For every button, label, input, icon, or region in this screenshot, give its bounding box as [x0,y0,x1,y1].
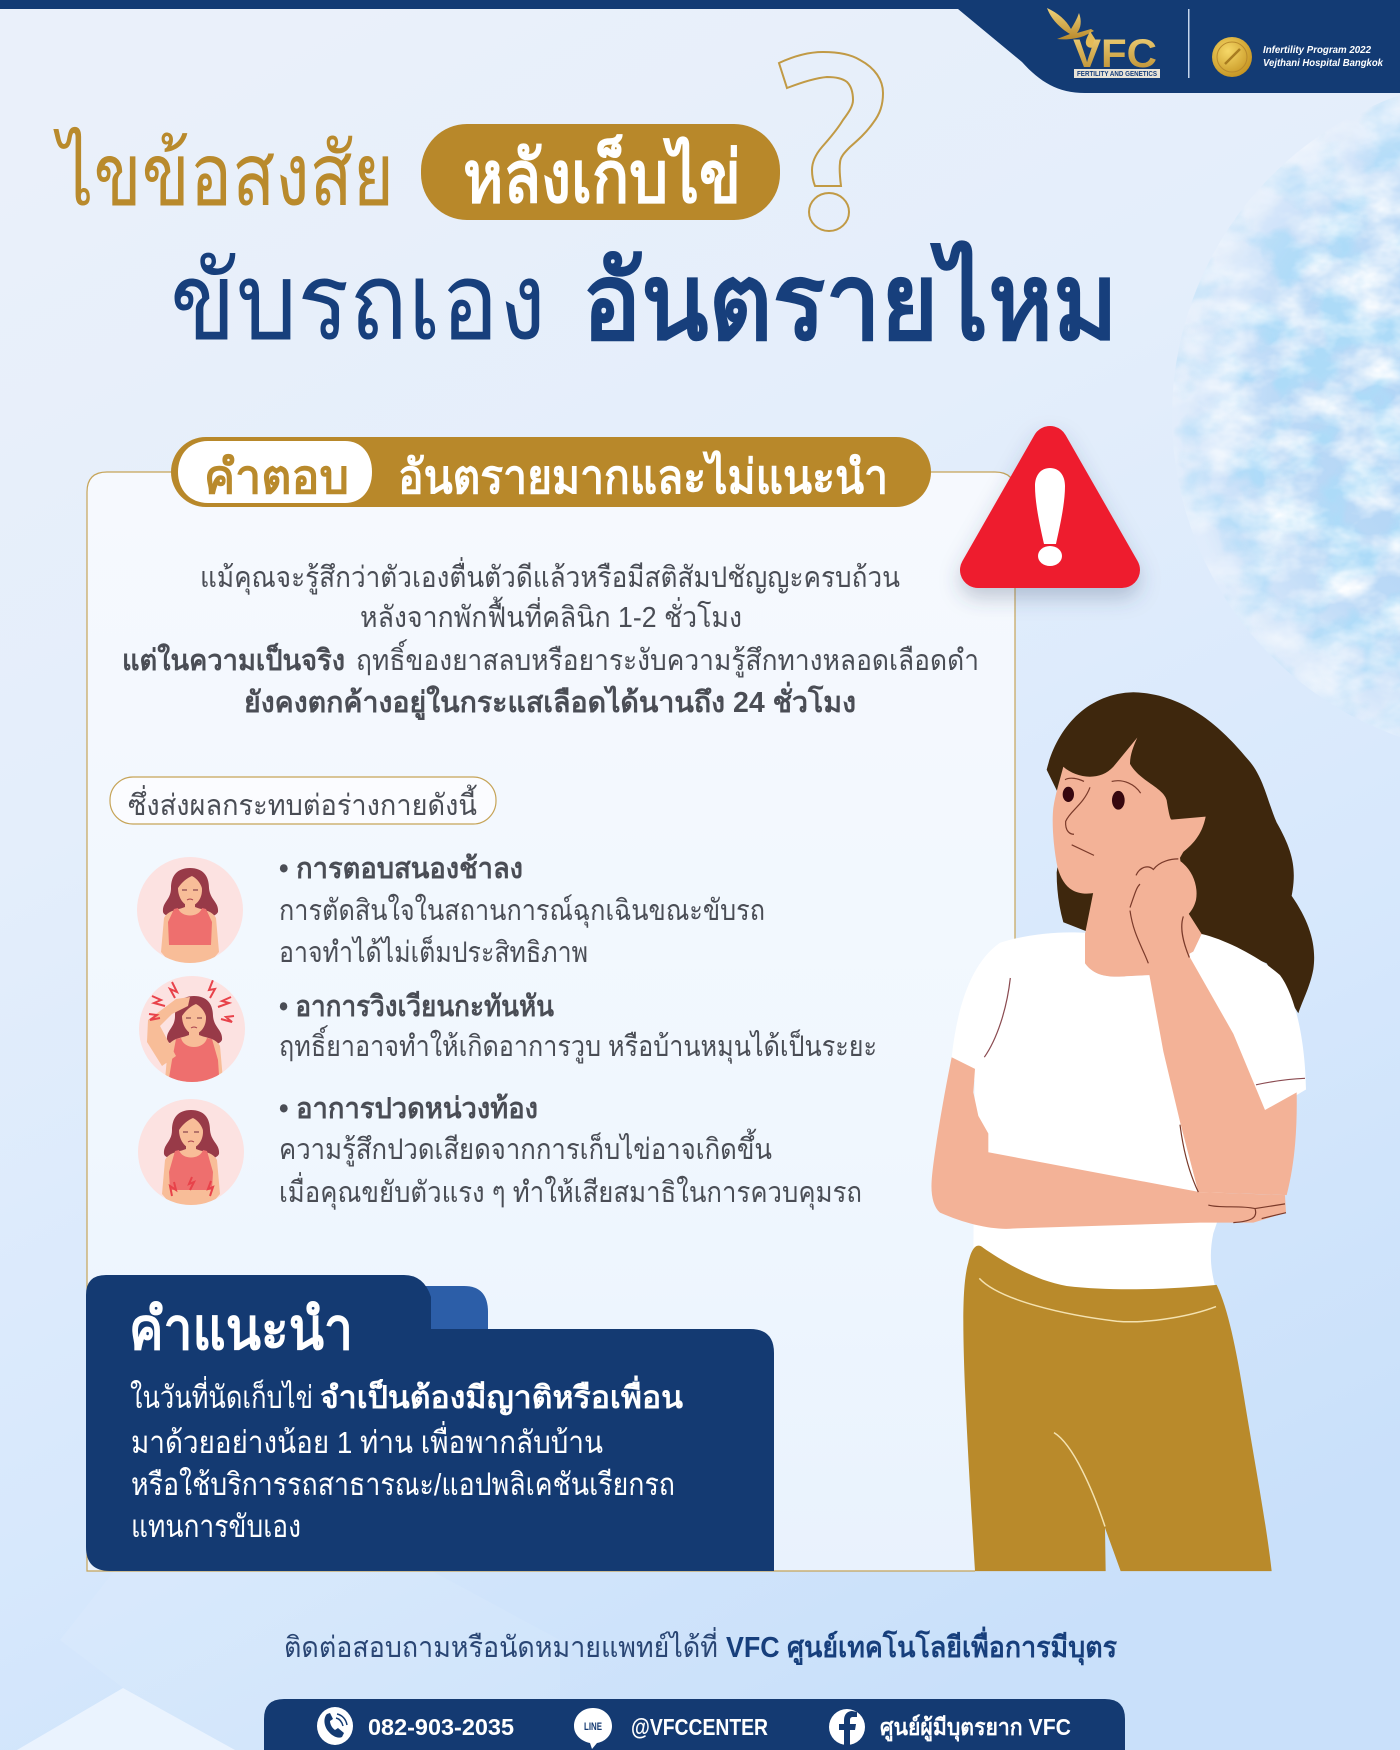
footer contact line: VFC ศูนย์เทคโนโลยีเพื่อการมีบุตร [726,1626,1117,1665]
paragraph: ยังคงตกค้างอยู่ในกระแสเลือดได้นานถึง 24 ชั่วโมง [244,681,856,720]
gold medal [1212,37,1252,77]
footer contact line [284,1626,1117,1665]
contact: phone: 082-903-2035 [368,1714,514,1740]
back tab [400,1286,488,1340]
icon: woman dizzy [139,976,245,1093]
item text: ความรู้สึกปวดเสียดจากการเก็บไข่อาจเกิดขึ้น [279,1128,772,1167]
item text: • อาการวิงเวียนกะทันหัน [279,991,554,1023]
header text: Vejthani Hospital Bangkok [1263,57,1384,69]
title text bold: อันตรายไหม [582,240,1118,362]
contact: line [574,1708,768,1749]
icon: line: LINE [584,1721,602,1733]
icon: bird [1047,8,1094,39]
advice heading: คำแนะนำ [129,1297,353,1362]
paragraph: แม้คุณจะรู้สึกว่าตัวเองตื่นตัวดีแล้วหรือมีสติสัมปชัญญะครบถ้วน [200,557,900,595]
item text: • อาการปวดหน่วงท้อง [279,1093,538,1125]
title text regular: ขับรถเอง [170,241,546,362]
arm folded [931,1057,1286,1229]
arm line details [1130,859,1286,1223]
item: dizziness [139,976,877,1093]
icon: phone [317,1707,353,1745]
face details [1065,778,1141,855]
pants lines [979,1278,1216,1527]
title line 2 [170,240,1118,362]
eyes [1063,787,1125,810]
advice text: แทนการขับเอง [131,1509,301,1544]
sphere texture [1176,98,1400,733]
divider [1188,9,1190,78]
sub heading pill: ซึ่งส่งผลกระทบต่อร่างกายดังนี้ [128,784,477,822]
paragraph: หลังจากพักฟื้นที่คลินิก 1-2 ชั่วโมง [360,596,742,634]
header band [0,0,1400,93]
decorative polygons [17,1570,560,1750]
title line 1 [53,52,883,231]
face [1053,737,1206,894]
footer bar [264,1699,1125,1750]
logo strip: FERTILITY AND GENETICS [1077,69,1157,78]
paragraph: แต่ในความเป็นจริง [122,642,345,677]
title pill: หลังเก็บไข่ [463,134,741,218]
answer pill [171,437,931,507]
pants [963,1246,1272,1571]
shirt creases [984,978,1305,1085]
contact: facebook [829,1709,1071,1745]
paragraph: ฤทธิ์ของยาสลบหรือยาระงับความรู้สึกทางหลอดเลือดดำ [356,639,979,678]
contact: facebook: ศูนย์ผู้มีบุตรยาก VFC [880,1714,1071,1742]
answer label: คำตอบ [204,450,349,503]
item text [279,853,765,969]
answer text: อันตรายมากและไม่แนะนำ [398,449,888,503]
icon: line [574,1708,612,1749]
panel: advice [86,1275,774,1571]
item text [279,1093,862,1210]
footer contact line: ติดต่อสอบถามหรือนัดหมายแพทย์ได้ที่ [284,1627,718,1664]
icon: warning triangle [978,444,1122,570]
item text: ฤทธิ์ยาอาจทำให้เกิดอาการวูบ หรือบ้านหมุนได้เป็นระยะ [279,1025,877,1064]
item: abdominal pain [138,1093,862,1210]
advice text: มาด้วยอย่างน้อย 1 ท่าน เพื่อพากลับบ้าน [131,1421,603,1460]
sub heading pill [110,777,496,824]
item text: การตัดสินใจในสถานการณ์ฉุกเฉินขณะขับรถ [279,893,765,928]
item text: • การตอบสนองช้าลง [279,853,523,885]
header text: Infertility Program 2022 [1263,44,1371,56]
item text: เมื่อคุณขยับตัวแรง ๆ ทำให้เสียสมาธิในการควบคุมรถ [279,1172,862,1210]
icon: drop [1086,31,1096,48]
icon: woman [137,857,243,965]
item: slower response [137,853,765,969]
logo: VFC [1047,8,1160,78]
neck [1085,858,1202,977]
advice box [86,1275,774,1571]
question mark outline [779,52,883,231]
contact: phone [317,1707,514,1745]
advice text: ในวันที่นัดเก็บไข่ [130,1376,313,1415]
panel: answer card [87,437,1015,1571]
item text [279,991,877,1064]
advice text [130,1375,683,1544]
illustration: thinking woman [931,692,1314,1571]
card fill [87,472,1015,1571]
title text gold: ไขข้อสงสัย [53,127,394,224]
card border [87,472,1015,1571]
item text: อาจทำได้ไม่เต็มประสิทธิภาพ [279,934,588,969]
arm raised [1130,857,1297,1195]
icon: woman with cramps [138,1099,244,1207]
contact: line: @VFCCENTER [631,1714,768,1740]
paragraph [122,557,979,720]
advice text: จำเป็นต้องมีญาติหรือเพื่อน [320,1375,683,1416]
VFC wordmark: VFC [1073,32,1157,76]
header text [1263,44,1384,69]
icon: facebook [829,1709,865,1745]
advice text: หรือใช้บริการรถสาธารณะ/แอปพลิเคชันเรียกรถ [131,1467,675,1502]
shirt [952,932,1306,1292]
hair [1047,692,1314,1013]
